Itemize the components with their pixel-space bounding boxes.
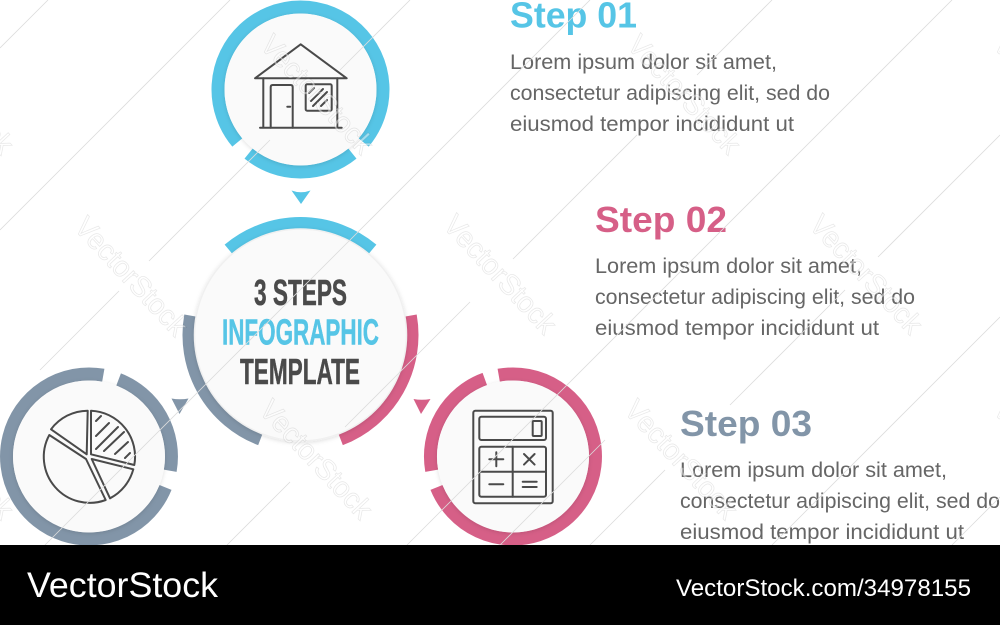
- arrow: step 02: [414, 399, 430, 414]
- footer logo: VectorStock: [27, 566, 219, 605]
- center circle: [189, 223, 412, 441]
- icon: house: [255, 44, 347, 128]
- text block: step 01: [510, 0, 830, 136]
- footer band: [0, 545, 1000, 625]
- title: TEMPLATE: [240, 351, 360, 392]
- arrow: step 03: [172, 398, 188, 414]
- watermarks: VectorStock: [253, 394, 379, 526]
- watermarks: VectorStock: [254, 29, 380, 161]
- text block: step 01: Lorem ipsum dolor sit amet,: [510, 51, 777, 74]
- text block: step 02: Lorem ipsum dolor sit amet,: [595, 255, 862, 278]
- icon: calculator: [473, 411, 553, 503]
- text block: step 01: consectetur adipiscing elit, sed do: [510, 82, 830, 105]
- title: 3 STEPS: [254, 272, 347, 313]
- text block: step 03: eiusmod tempor incididunt ut: [680, 521, 964, 544]
- text block: step 02: eiusmod tempor incididunt ut: [595, 317, 879, 340]
- arrow: step 01: [292, 190, 310, 204]
- text block: step 01: eiusmod tempor incididunt ut: [510, 113, 794, 136]
- footer image id: VectorStock.com/34978155: [676, 575, 971, 602]
- text block: step 03: Lorem ipsum dolor sit amet,: [680, 459, 947, 482]
- watermarks: VectorStock: [437, 209, 563, 341]
- watermarks: VectorStock: [621, 29, 747, 161]
- watermarks: VectorStock: [803, 209, 929, 341]
- step 01 circle: [218, 7, 383, 172]
- step 02 circle: calculator: [430, 374, 595, 539]
- watermarks: [0, 29, 1000, 526]
- title: [222, 272, 379, 392]
- watermarks: VectorStock: [68, 211, 194, 343]
- step 03 circle: pie chart: [7, 374, 171, 539]
- text block: step 03: consectetur adipiscing elit, sed do: [680, 490, 1000, 513]
- title: INFOGRAPHIC: [222, 312, 379, 352]
- icon: pie chart: [44, 411, 135, 503]
- text block: step 02: consectetur adipiscing elit, sed do: [595, 286, 915, 309]
- text block: step 03: [680, 403, 1000, 544]
- text block: step 02: [595, 199, 915, 340]
- watermarks: VectorStock: [618, 394, 744, 526]
- text block: step 03: Step 03: [680, 403, 812, 444]
- text block: step 02: Step 02: [595, 199, 727, 240]
